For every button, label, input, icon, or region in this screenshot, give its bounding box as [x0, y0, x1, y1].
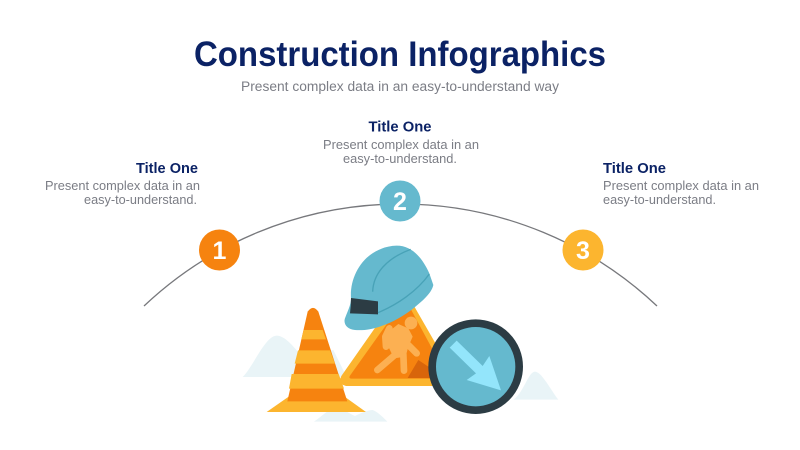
text block 1: easy-to-understand.	[84, 193, 197, 207]
text block 3: Title One	[603, 161, 666, 177]
background hills	[243, 336, 558, 422]
step 2 marker: 2	[393, 188, 407, 216]
text block 2: Title One	[368, 120, 432, 136]
hard hat	[345, 246, 433, 330]
step 3 marker: 3	[576, 237, 590, 265]
warning sign	[340, 287, 460, 386]
text block 3: Present complex data in an	[603, 179, 759, 193]
traffic cone	[267, 308, 366, 412]
text block 2: Present complex data in an	[323, 138, 479, 152]
step 2 marker	[380, 180, 420, 222]
title: Construction Infographics	[194, 35, 606, 74]
arc line	[144, 204, 657, 306]
text block 2: easy-to-understand.	[343, 152, 457, 166]
construction illustration	[243, 246, 558, 422]
text block 1: Title One	[136, 161, 198, 177]
step 1 marker	[199, 230, 240, 270]
step 3 marker	[562, 230, 604, 270]
text block 1	[45, 161, 200, 207]
text block 3	[603, 161, 759, 207]
subtitle: Present complex data in an easy-to-understand way	[241, 79, 559, 94]
text block 1: Present complex data in an	[45, 179, 200, 193]
direction sign	[432, 323, 519, 410]
worker figure	[377, 328, 417, 371]
text block 2	[323, 120, 479, 166]
text block 3: easy-to-understand.	[603, 193, 716, 207]
step 1 marker: 1	[213, 237, 227, 265]
